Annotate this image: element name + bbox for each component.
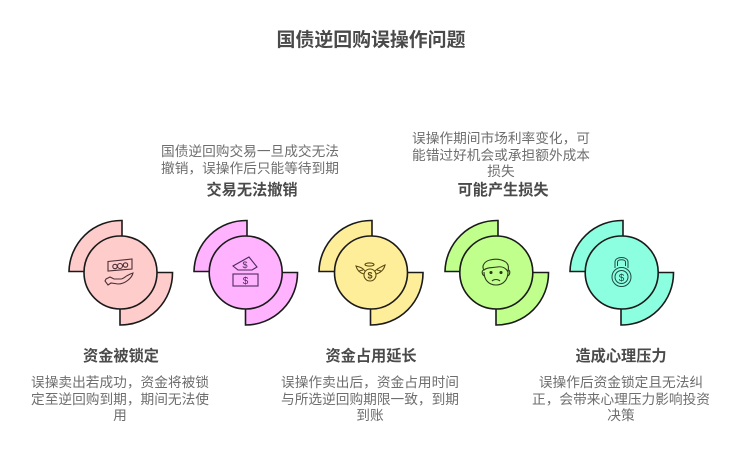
- step 3: yellow ring: [319, 220, 423, 325]
- text block: 交易无法撤销 description: [161, 144, 339, 176]
- heading: 资金被锁定: 资金被锁定: [83, 348, 159, 365]
- text block: 交易无法撤销 description: 国债逆回购交易一旦成交无法: [161, 144, 339, 159]
- icon: padlock with dollar: [612, 258, 631, 286]
- text block: 可能产生损失 description: 误操作期间市场利率变化，可: [412, 131, 590, 146]
- step 4: green ring: [445, 220, 549, 325]
- text block: 资金占用延长 description: [281, 375, 459, 423]
- icon: winged coin: $: [367, 270, 373, 280]
- step 1: pink ring: [69, 220, 173, 325]
- step 2: purple ring: [194, 220, 298, 325]
- title: 国债逆回购误操作问题: [277, 30, 465, 51]
- text block: 交易无法撤销 description: 撤销，误操作后只能等待到期: [161, 161, 339, 176]
- heading: 可能产生损失: 可能产生损失: [457, 182, 549, 199]
- text block: 造成心理压力 description: 误操作后资金锁定且无法纠: [539, 375, 703, 390]
- icon: money over hand: [105, 259, 133, 285]
- text block: 资金被锁定 description: 用: [113, 408, 127, 423]
- text block: 可能产生损失 description: [412, 131, 590, 179]
- text block: 造成心理压力 description: 正，会带来心理压力影响投资: [532, 392, 710, 407]
- icon: padlock with dollar: $: [619, 273, 625, 284]
- text block: 资金被锁定 description: 误操卖出若成功，资金将被锁: [31, 375, 209, 390]
- icon: worried face: [482, 259, 510, 285]
- heading: 资金占用延长: 资金占用延长: [325, 348, 417, 365]
- heading: 交易无法撤销: 交易无法撤销: [206, 182, 298, 199]
- text block: 资金占用延长 description: 误操作卖出后，资金占用时间: [281, 375, 459, 390]
- icon: winged coin: [356, 263, 385, 281]
- step 5: teal ring: [570, 220, 674, 325]
- icon: banknotes: $: [242, 260, 248, 270]
- text block: 资金被锁定 description: 定至逆回购到期，期间无法使: [31, 392, 209, 407]
- text block: 造成心理压力 description: 决策: [607, 408, 635, 423]
- icon: banknotes: [233, 257, 258, 287]
- text block: 资金被锁定 description: [31, 375, 209, 423]
- text block: 资金占用延长 description: 到账: [356, 408, 384, 423]
- text block: 可能产生损失 description: 能错过好机会或承担额外成本: [412, 148, 590, 163]
- text block: 造成心理压力 description: [532, 375, 710, 423]
- text block: 可能产生损失 description: 损失: [487, 164, 515, 179]
- heading: 造成心理压力: 造成心理压力: [575, 348, 667, 365]
- text block: 资金占用延长 description: 与所选逆回购期限一致，到期: [281, 392, 459, 407]
- icon: banknotes: $: [243, 276, 249, 287]
